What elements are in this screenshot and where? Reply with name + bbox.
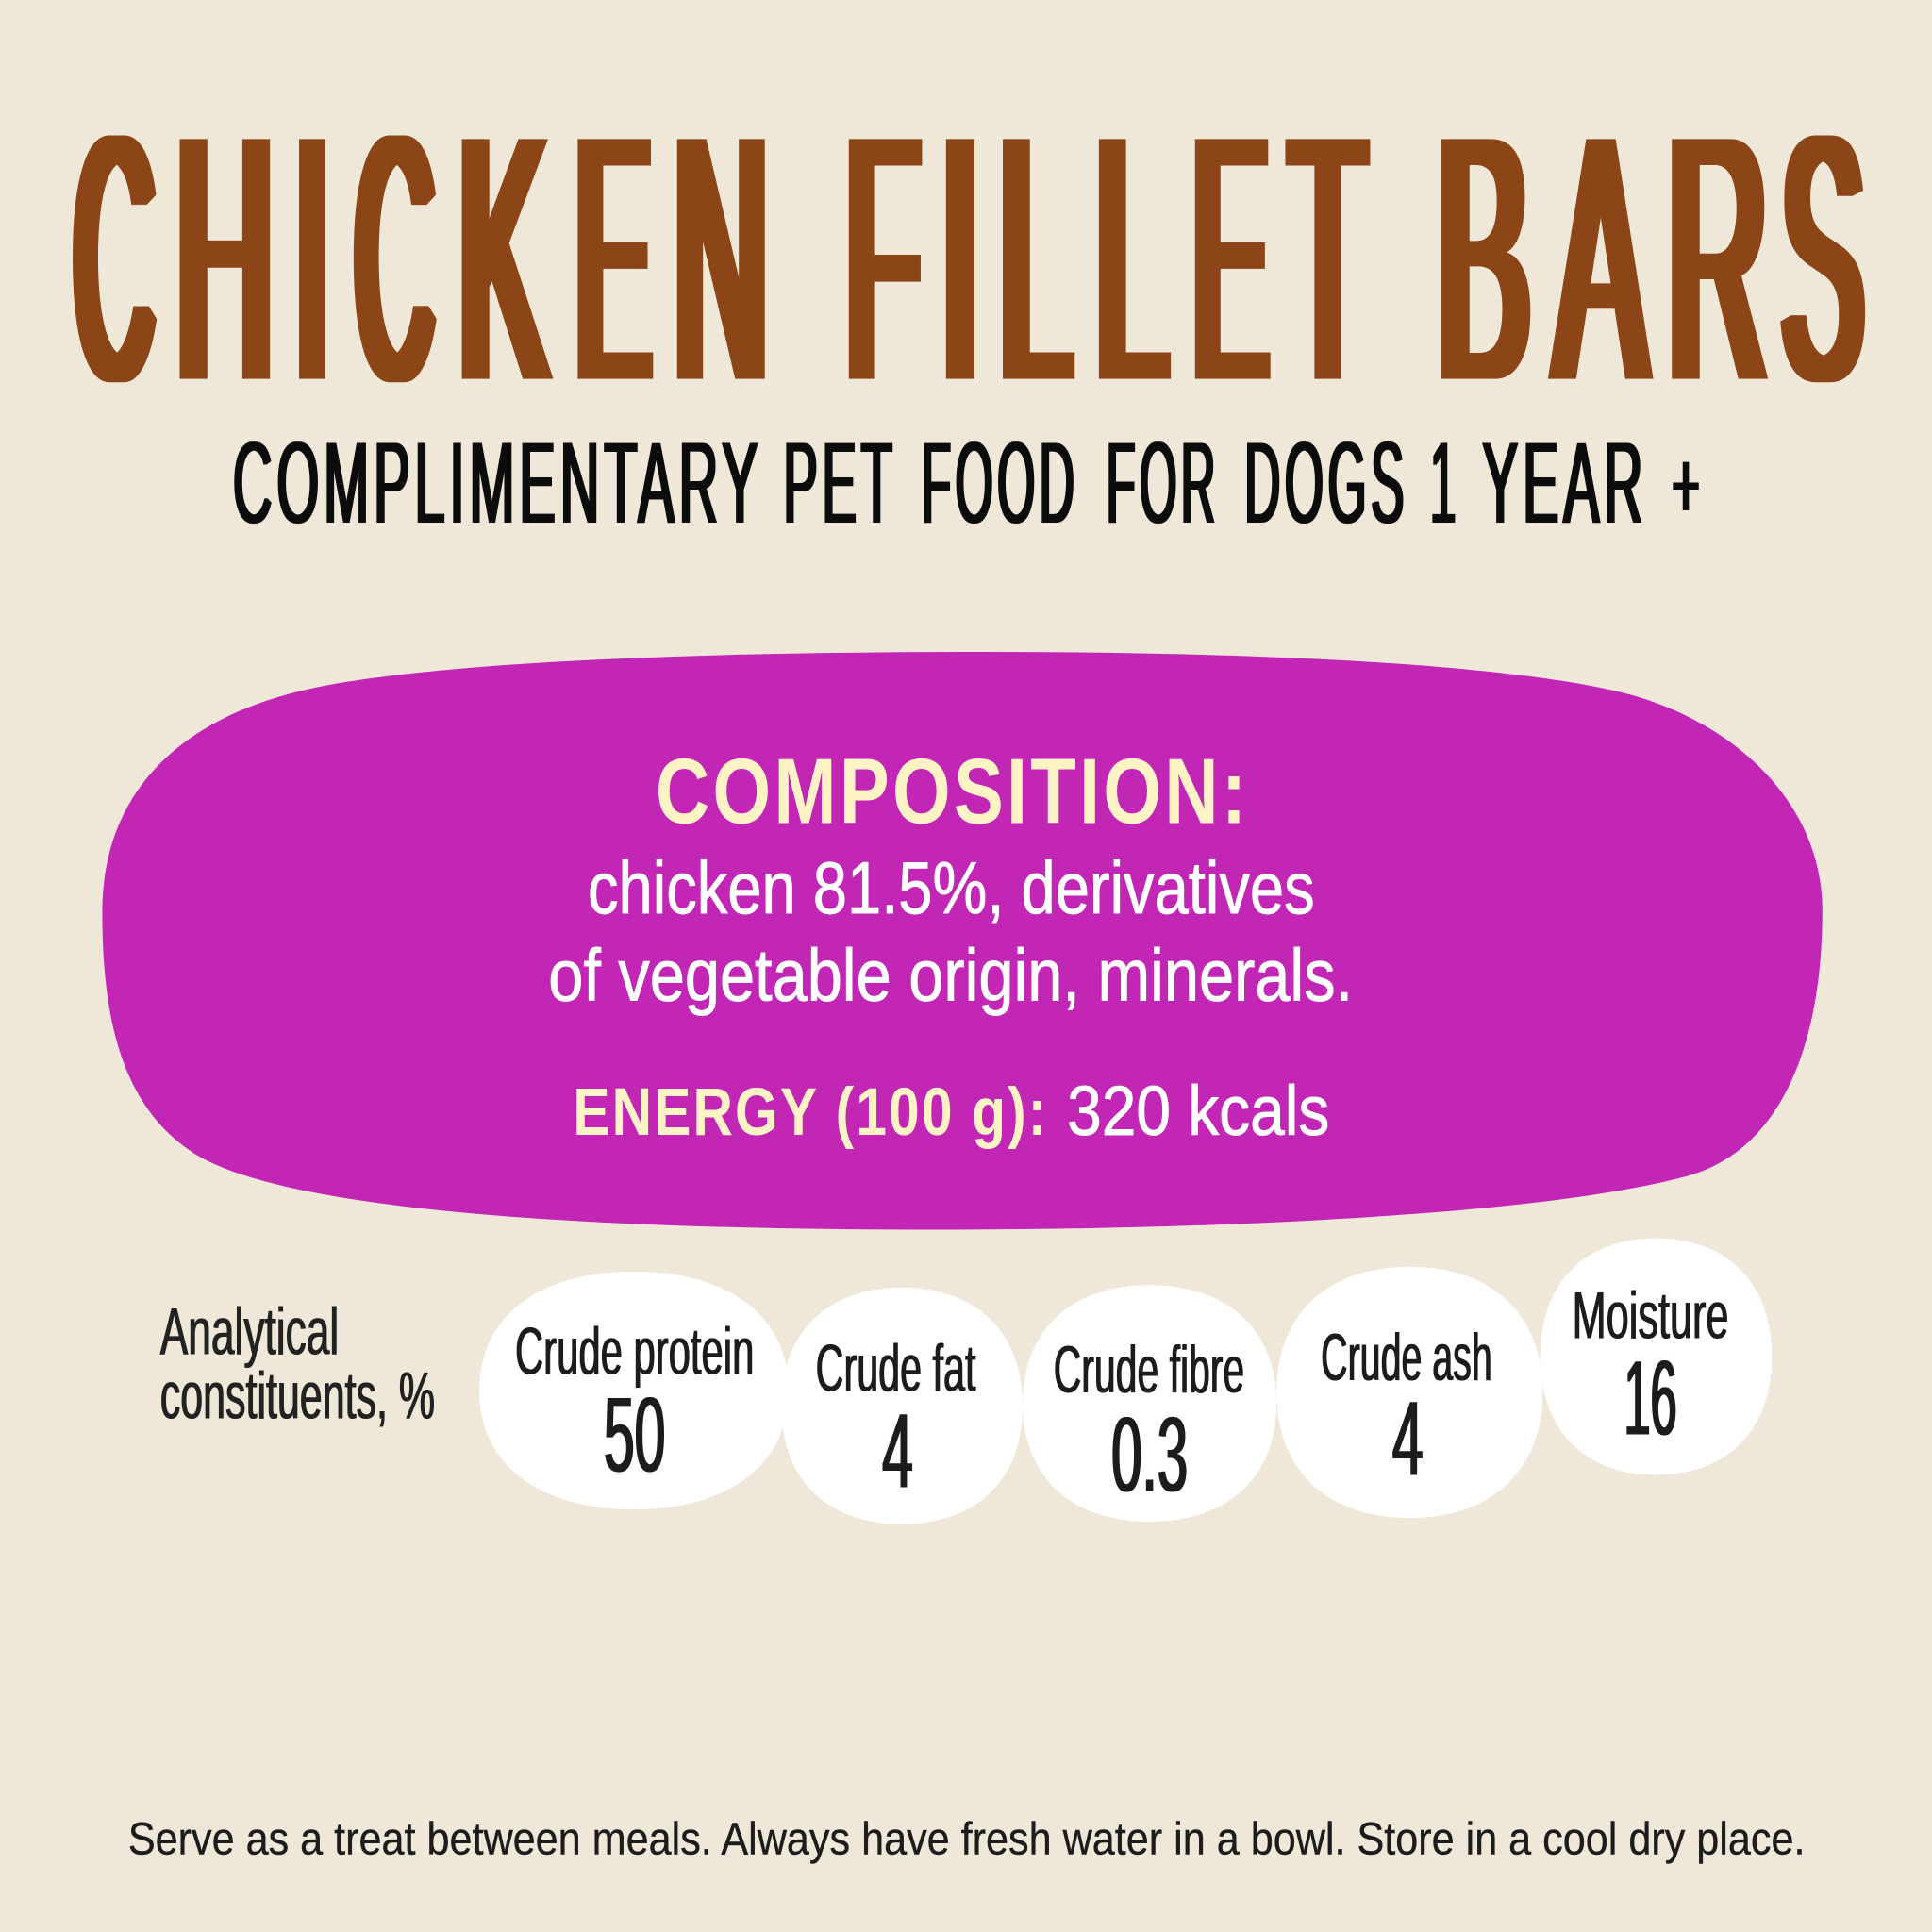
pill: crude fat: 4 [882, 1391, 913, 1509]
composition text line 1: chicken 81.5%, derivatives [588, 846, 1315, 929]
pill: crude fat [781, 1288, 1023, 1524]
pill: crude fat: Crude fat [816, 1331, 976, 1406]
subtitle: YEAR [1482, 419, 1647, 548]
pill: crude protein [479, 1272, 789, 1509]
title: H [176, 64, 274, 454]
analytical constituents label: Analytical [160, 1293, 339, 1368]
pill: crude protein: Crude protein [515, 1313, 754, 1388]
title: T [1291, 64, 1365, 454]
pill: moisture: Moisture [1573, 1277, 1728, 1352]
pill: moisture [1541, 1239, 1772, 1474]
title: B [1438, 64, 1530, 454]
pill: crude ash: Crude ash [1321, 1320, 1492, 1394]
energy label: ENERGY (100 g): [573, 1074, 1049, 1150]
subtitle: FOOD [922, 419, 1078, 548]
title: C [356, 64, 433, 454]
pill: crude ash [1276, 1267, 1542, 1518]
panel: composition [102, 652, 1823, 1230]
title: L [1096, 64, 1168, 454]
title: L [1000, 64, 1072, 454]
purple blob background [102, 652, 1823, 1230]
title: I [941, 64, 980, 454]
title [75, 64, 1863, 454]
title: E [576, 64, 650, 454]
subtitle: 1 [1430, 419, 1459, 548]
title: N [674, 64, 768, 454]
title: C [75, 64, 154, 454]
pill: crude fibre: Crude fibre [1054, 1332, 1244, 1407]
energy value: 320 kcals [1067, 1072, 1329, 1150]
pill: crude fibre [1023, 1285, 1276, 1522]
composition text line 2: of vegetable origin, minerals. [548, 934, 1353, 1017]
subtitle: COMPLIMENTARY [233, 419, 762, 548]
title: R [1668, 64, 1767, 454]
composition heading: COMPOSITION: [656, 739, 1249, 842]
analytical constituents label: constituents, % [160, 1357, 435, 1432]
title: E [1193, 64, 1268, 454]
subtitle: PET [783, 419, 897, 548]
pill: moisture: 16 [1624, 1338, 1677, 1457]
pill: crude fibre: 0.3 [1111, 1394, 1188, 1513]
title: A [1556, 64, 1647, 454]
subtitle: FOR [1107, 419, 1220, 548]
analytical constituents label [160, 1293, 435, 1432]
title: F [846, 64, 919, 454]
pill: crude protein: 50 [604, 1375, 665, 1494]
pill: crude ash: 4 [1392, 1378, 1424, 1497]
title: K [458, 64, 547, 454]
text: + [1672, 430, 1700, 541]
subtitle: DOGS [1244, 419, 1408, 548]
title: I [296, 64, 328, 454]
